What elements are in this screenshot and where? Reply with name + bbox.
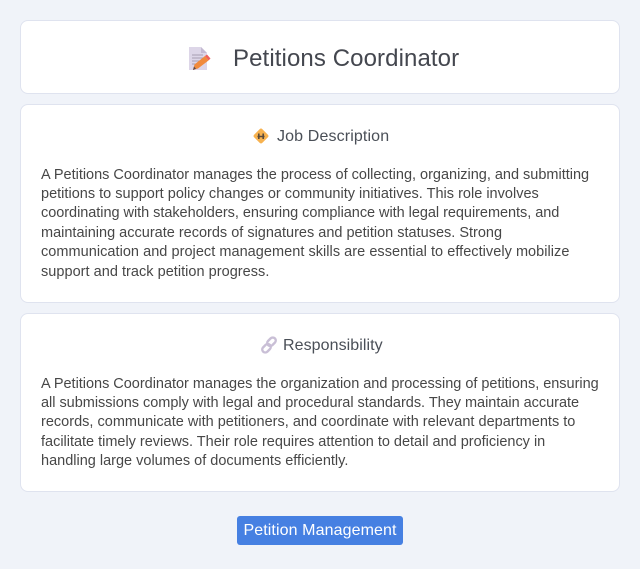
text: job description paragraph: maintaining accurate records of signatures and petition statuses. Strong xyxy=(41,225,502,241)
icon: document with pencil xyxy=(189,47,210,70)
text: job description paragraph: support and track petition progress. xyxy=(41,264,269,280)
heading: responsibility: Responsibility xyxy=(283,337,383,354)
text: job description paragraph: petitions to support policy changes or community initiatives. This role involves xyxy=(41,186,539,202)
text: responsibility paragraph: handling large volumes of documents efficiently. xyxy=(41,453,348,469)
title: Petitions Coordinator xyxy=(233,45,459,72)
text: job description paragraph: A Petitions Coordinator manages the process of collecting, organizing, and submitting xyxy=(41,167,589,183)
text: job description paragraph: coordinating with stakeholders, ensuring compliance with legal requirements, and xyxy=(41,205,559,221)
text: responsibility paragraph: records, communicate with petitioners, and coordinate with relevant departments to xyxy=(41,414,575,430)
text: job description paragraph xyxy=(41,167,589,280)
text: responsibility paragraph: all submissions comply with legal and procedural standards. They maintain accurate xyxy=(41,395,579,411)
heading: job description: Job Description xyxy=(277,128,389,145)
icon: chain link xyxy=(261,336,277,354)
text: responsibility paragraph: A Petitions Coordinator manages the organization and processing of petitions, ensuring xyxy=(41,376,599,392)
panel: title card xyxy=(20,20,620,94)
icon: construction diamond xyxy=(254,128,268,144)
text: responsibility paragraph xyxy=(41,376,599,469)
panel: job description xyxy=(20,104,620,303)
text: job description paragraph: communication and project management skills are essential to effectively mobilize xyxy=(41,244,569,260)
text: responsibility paragraph: facilitate timely reviews. Their role requires attention to detail and proficiency in xyxy=(41,434,545,450)
tag: petition management xyxy=(237,516,403,545)
panel: responsibility xyxy=(20,313,620,492)
tag: petition management: Petition Management xyxy=(243,522,397,539)
